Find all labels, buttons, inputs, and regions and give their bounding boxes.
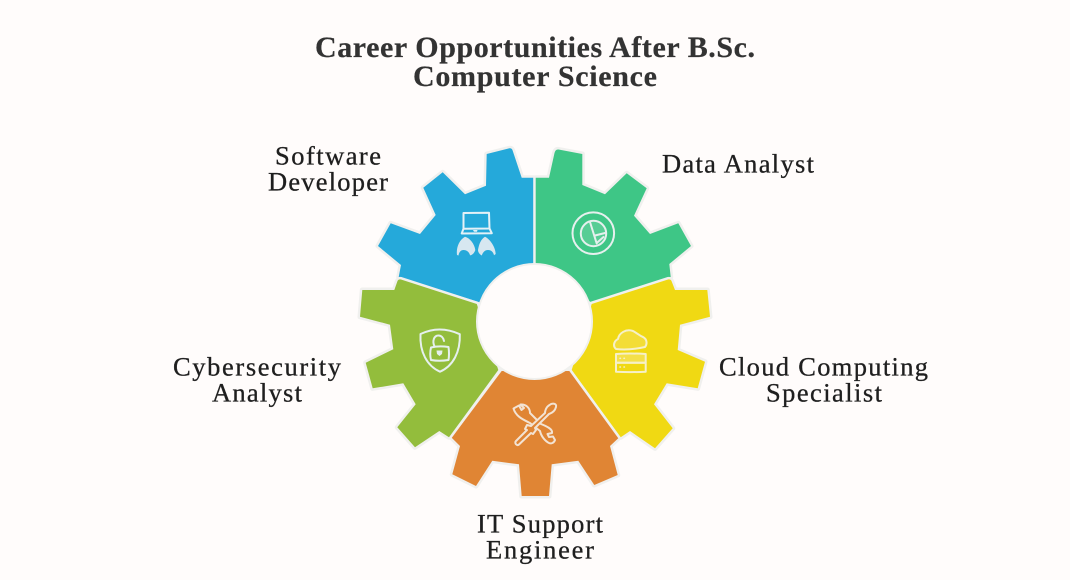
center hole xyxy=(477,264,592,379)
segment: data analyst (green) xyxy=(536,149,691,302)
icon: crossed wrench and screwdriver xyxy=(514,404,556,445)
icon: shield with lock xyxy=(420,330,460,372)
label: software developer: Software xyxy=(275,140,381,170)
gear diagram xyxy=(360,148,710,496)
label: cybersecurity analyst: Cybersecurity xyxy=(173,352,342,382)
title: Career Opportunities After B.Sc. xyxy=(315,31,755,64)
label: cybersecurity analyst xyxy=(173,352,342,408)
label: it support engineer: IT Support xyxy=(477,508,604,538)
label: cloud computing specialist xyxy=(719,352,928,408)
label: it support engineer: Engineer xyxy=(486,534,594,564)
icon: cloud and server xyxy=(614,330,647,372)
label: cloud computing specialist: Cloud Computing xyxy=(719,352,928,382)
icon: pie chart in circle xyxy=(572,212,614,254)
segment: cybersecurity analyst (lime) xyxy=(360,279,498,447)
label: cloud computing specialist: Specialist xyxy=(766,378,883,408)
label: cybersecurity analyst: Analyst xyxy=(212,378,303,408)
title: Computer Science xyxy=(413,60,657,93)
title xyxy=(315,31,755,93)
label: software developer: Developer xyxy=(268,166,388,196)
label: data analyst: Data Analyst xyxy=(662,148,815,178)
label: software developer xyxy=(268,140,388,196)
segment: it support engineer (orange) xyxy=(452,371,618,496)
icon: laptop with hands xyxy=(457,213,496,256)
segment: software developer (blue) xyxy=(378,148,534,302)
segment: cloud computing specialist (yellow) xyxy=(572,279,710,448)
label: it support engineer xyxy=(477,508,604,564)
